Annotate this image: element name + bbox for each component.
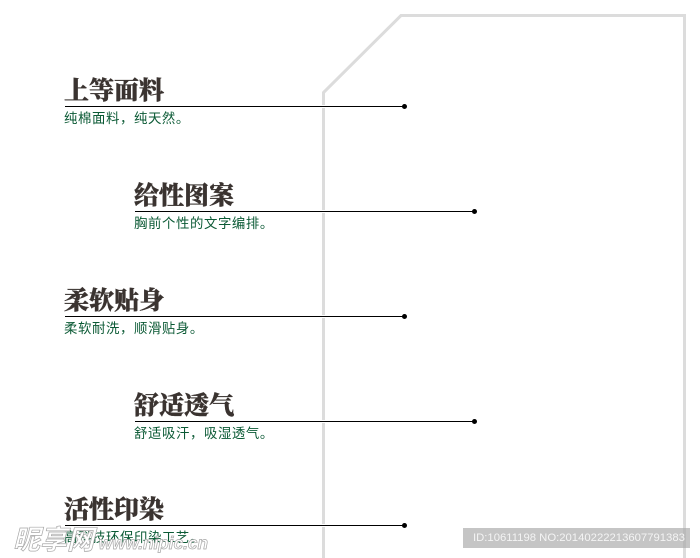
feature: 柔软贴身: 柔软贴身 xyxy=(64,288,164,315)
feature: 柔软贴身 xyxy=(64,286,407,336)
watermark: ID bar xyxy=(463,528,690,548)
feature: 活性印染: 活性印染 xyxy=(64,497,164,524)
feature: 舒适透气 xyxy=(134,392,477,441)
feature: 舒适透气: 舒适吸汗，吸湿透气。 xyxy=(134,426,274,441)
feature: 上等面料: 上等面料 xyxy=(64,78,164,105)
feature: 给性图案: 给性图案 xyxy=(134,183,234,210)
watermark: ID bar: ID:10611198 NO:20140222213607791383 xyxy=(473,532,685,544)
feature: 上等面料: 纯棉面料，纯天然。 xyxy=(64,111,190,126)
feature: 舒适透气: 舒适透气 xyxy=(134,393,234,420)
feature: 活性印染 xyxy=(64,496,407,545)
feature: 给性图案: 胸前个性的文字编排。 xyxy=(134,216,274,231)
feature: 活性印染: 高科技环保印染工艺。 xyxy=(64,530,204,545)
watermark: nipic logo: 昵享网 www.nipic.cn xyxy=(13,525,208,555)
feature: 给性图案 xyxy=(134,182,477,231)
feature: 上等面料 xyxy=(64,77,407,126)
feature: 柔软贴身: 柔软耐洗，顺滑贴身。 xyxy=(64,321,204,336)
